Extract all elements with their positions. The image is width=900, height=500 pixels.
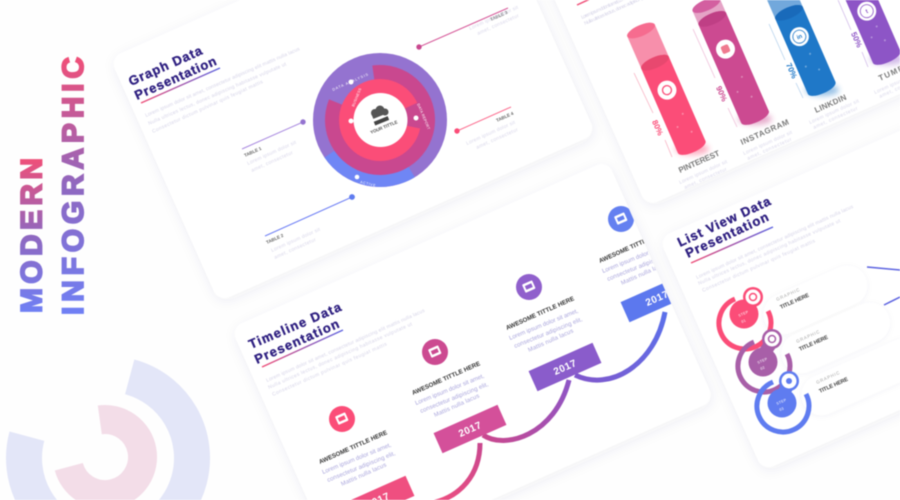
step 01: STEP xyxy=(738,310,749,318)
step 02 xyxy=(738,329,829,392)
bar: tumblr xyxy=(829,0,900,68)
label: 80 percent: 80% xyxy=(650,119,665,137)
label: pinterest: PINTEREST xyxy=(677,149,721,175)
step 03: GRAPHIC xyxy=(815,370,841,385)
callout: table 1 xyxy=(242,119,306,174)
step 03: 03 xyxy=(779,406,785,412)
milestone 2: Lorem ipsum dolor sit amet, xyxy=(415,373,486,407)
milestone 3 xyxy=(505,274,601,391)
intro text: Nulla ultrices lectus, donec adipiscing habitasse vulputate ut xyxy=(267,321,414,391)
step 02: STEP xyxy=(757,357,768,365)
panel: list view data presentation xyxy=(659,67,900,471)
callout: table 3 xyxy=(416,5,520,50)
milestone 4 xyxy=(599,205,672,323)
callout: table 2: amet, consectetur xyxy=(273,237,317,261)
callout: table 4: amet, consectetur xyxy=(475,127,519,151)
callout: table 3: Lorem ipsum dolor sit xyxy=(468,5,520,32)
vertical title xyxy=(16,57,90,315)
bar: pinterest xyxy=(625,20,709,158)
milestone 3: AWESOME TITTLE HERE xyxy=(505,295,575,332)
label: linkdin: LINKDIN xyxy=(813,93,848,115)
heading: list view: List View Data xyxy=(675,193,773,250)
bar: instagram xyxy=(690,0,772,128)
heading underline fragment xyxy=(577,0,590,5)
milestone 3: 2017 xyxy=(552,358,579,378)
milestone 1: Mattis nulla lacus xyxy=(340,462,388,488)
decorative concentric arcs xyxy=(24,377,192,500)
curved connector 3 xyxy=(575,312,665,380)
label: instagram xyxy=(739,117,794,162)
milestone 3: consectetur adipiscing elit, xyxy=(514,317,584,350)
heading: timeline: Presentation xyxy=(252,316,341,367)
bar: linkedin: in xyxy=(796,34,804,41)
label: 90 percent: 90% xyxy=(714,85,729,103)
label: instagram: INSTAGRAM xyxy=(739,117,791,147)
intro text: Consectetur dictum pulvinar quis feugiat mattis xyxy=(701,238,817,294)
step 03: STEP xyxy=(776,398,787,406)
milestone 4: 2017 xyxy=(644,289,671,309)
step 03 xyxy=(757,370,849,432)
callout: table 4 xyxy=(454,107,519,151)
milestone 4: Lorem ipsum dolor sit amet, xyxy=(602,241,673,275)
intro text: Consectetur dictum pulvinar quis feugiat mattis xyxy=(271,341,388,398)
milestone 3: Lorem ipsum dolor sit amet, xyxy=(509,308,580,342)
label: linkdin: amet, consectetur xyxy=(812,106,859,131)
callout: table 3: amet, consectetur xyxy=(476,13,520,37)
milestone 2: consectetur adipiscing elit, xyxy=(420,382,490,415)
bar: linkedin xyxy=(756,0,839,99)
callout: table 1: TABLE 1 xyxy=(243,146,263,158)
callout: table 1: Lorem ipsum dolor sit xyxy=(246,140,298,167)
label: linkdin: Lorem ipsum dolor sit xyxy=(808,98,861,126)
milestone 2: AWESOME TITTLE HERE xyxy=(411,360,481,397)
label: instagram: Lorem ipsum dolor sit xyxy=(742,130,794,157)
callout: table 1: amet, consectetur xyxy=(250,150,294,174)
label: pinterest: amet, consectetur xyxy=(683,167,728,191)
milestone 2: 2017 xyxy=(457,420,484,440)
label: 50 percent xyxy=(838,0,868,67)
panel: social bars xyxy=(541,0,900,207)
milestone 1: AWESOME TITTLE HERE xyxy=(318,429,388,466)
step 02: GRAPHIC xyxy=(795,329,821,344)
intro text: Lorem ipsum dolor sit amet, consectetur adipiscing elit mattis nulla lacus xyxy=(265,308,426,384)
vertical title: MODERN xyxy=(16,158,48,313)
step 01: TITLE HERE xyxy=(779,293,810,311)
list pills xyxy=(757,259,900,422)
curved connector 2 xyxy=(483,380,569,440)
callout: table 2 xyxy=(265,194,355,261)
callout: table 2: Lorem ipsum dolor sit xyxy=(270,227,322,254)
intro text: Nulla ultrices lectus, donec adipiscing habitasse vulputate ut xyxy=(697,218,842,287)
donut chart: ACTIVE xyxy=(360,180,377,188)
right connector lines xyxy=(867,267,900,305)
milestone 3: Mattis nulla lacus xyxy=(527,328,575,354)
heading underline xyxy=(141,68,220,103)
label: pinterest xyxy=(677,149,729,191)
step 02: TITLE HERE xyxy=(798,335,829,353)
intro text: Nulla ultrices lectus, donec adipiscing habitasse vulputate ut xyxy=(147,61,288,127)
donut chart: DATA REPORT xyxy=(416,103,431,131)
callout: table 4: TABLE 4 xyxy=(495,111,515,123)
vertical title: INFOGRAPHIC xyxy=(57,57,90,315)
intro text: Lorem ipsum dolor sit amet, consectetur adipiscing elit mattis nulla lacus xyxy=(144,46,301,119)
heading: timeline: Timeline Data xyxy=(246,299,344,352)
donut chart xyxy=(313,53,447,188)
bar: tumblr: t xyxy=(865,9,869,15)
milestone 4: AWESOME TITTLE HERE xyxy=(598,228,668,265)
label: 70 percent xyxy=(769,24,803,98)
timeline clipped to panel xyxy=(318,206,693,500)
curved connector 1 xyxy=(432,443,480,500)
panel: graph data presentation xyxy=(110,0,596,302)
label: tumblr xyxy=(873,58,900,100)
label: 70 percent: 70% xyxy=(784,62,799,80)
donut chart: DATA ANALYSIS xyxy=(332,72,369,92)
milestone 1: Lorem ipsum dolor sit amet, xyxy=(322,442,393,476)
callout: table 4: Lorem ipsum dolor sit xyxy=(465,120,517,147)
intro text: Consectetur dictum pulvinar quis feugiat mattis xyxy=(151,79,264,135)
label: 90 percent xyxy=(693,29,737,127)
milestone 2: Mattis nulla lacus xyxy=(433,393,481,419)
icon: cloud xyxy=(371,106,389,125)
donut chart: YOUR TITTLE xyxy=(370,119,398,135)
heading: list view: Presentation xyxy=(683,209,771,261)
milestone 4: Mattis nulla lacus xyxy=(620,261,668,287)
panel: timeline data presentation xyxy=(246,205,672,500)
callout: table 2: TABLE 2 xyxy=(265,233,285,245)
heading underline xyxy=(691,227,773,263)
milestone 2 xyxy=(411,339,506,453)
step 01 xyxy=(719,287,810,349)
label: instagram: amet, consectetur xyxy=(746,137,793,162)
milestone 1 xyxy=(318,406,414,500)
step 01: 01 xyxy=(741,318,747,324)
heading: graph data: Graph Data xyxy=(126,43,205,89)
step 03: TITLE HERE xyxy=(818,377,849,395)
label: 50 percent: 50% xyxy=(849,31,864,49)
label: pinterest: Lorem ipsum dolor sit xyxy=(678,159,729,186)
heading: graph data: Presentation xyxy=(132,53,219,103)
milestone 4: consectetur adipiscing elit, xyxy=(607,250,677,283)
intro text: Lorem ipsum dolor sit amet, consectetur adipiscing elit mattis nulla lacus xyxy=(695,204,855,281)
callout: table 3: TABLE 3 xyxy=(489,10,509,22)
step 01: GRAPHIC xyxy=(775,287,801,302)
heading underline xyxy=(262,330,343,367)
label: 80 percent xyxy=(634,73,672,157)
milestone 1: consectetur adipiscing elit, xyxy=(327,451,397,484)
step 02: 02 xyxy=(760,365,766,371)
donut chart: BUSINESS xyxy=(351,87,363,107)
